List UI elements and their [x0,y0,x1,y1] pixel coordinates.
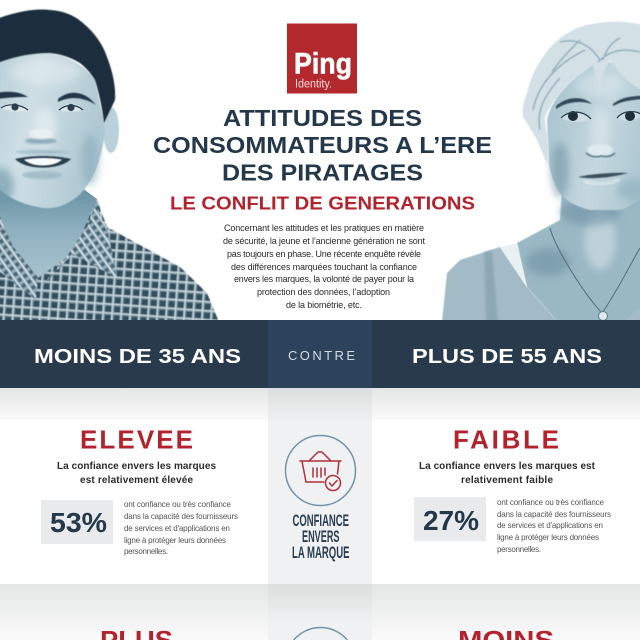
statement [57,461,216,486]
statement [419,461,596,486]
intro text: pas toujours en phase. Une récente enquête révèle [227,249,421,259]
intro text: des différences marquées touchant la confiance [231,262,417,272]
description: de services et d'applications en [497,521,603,530]
label: brand trust: ENVERS [302,527,340,546]
face [547,60,640,210]
brows and eyes [556,98,592,109]
nose [587,144,613,156]
smile [16,150,68,154]
neck [0,189,97,278]
label: brand trust: CONFIANCE [292,511,349,530]
icon: shopping basket with check [286,436,356,506]
stat box [414,497,486,541]
description: personnelles. [497,545,541,554]
heading: ELEVEE [80,424,193,454]
description: dans la capacité des fournisseurs [124,512,238,521]
left collar [0,212,38,300]
title [153,105,492,186]
heading: FAIBLE [453,424,559,454]
description: personnelles. [124,547,168,556]
mouth [578,173,628,178]
photo: older woman [442,22,640,322]
intro text: Concernant les attitudes et les pratiques en matière [224,223,424,233]
intro text [223,223,425,310]
description [497,498,611,554]
statement: relativement faible [461,475,553,486]
title: ATTITUDES DES [223,105,422,131]
row shadows and centre column [0,388,640,640]
hair [0,10,115,123]
face [0,53,105,208]
label: brand trust: LA MARQUE [292,543,350,562]
stat box: 53% [50,507,107,538]
subtitle: LE CONFLIT DE GENERATIONS [170,192,475,214]
stat box [41,500,113,544]
intro text: de sécurité, la jeune et l’ancienne génération ne sont [223,236,425,246]
stat box: 27% [423,505,479,536]
description [124,500,238,556]
description: ont confiance ou très confiance [497,498,605,507]
necklace [550,228,640,313]
logo: Ping Identity [287,24,357,94]
strap [500,243,527,287]
header band [0,320,640,388]
statement: La confiance envers les marques est [419,461,596,472]
ear [103,107,119,153]
hair [523,22,640,165]
nose [25,138,57,144]
next row icon circle [294,628,347,640]
description: ligne à protéger leurs données [497,533,599,542]
versus label: CONTRE [288,348,355,363]
description: de services et d'applications en [124,524,230,533]
intro text: de la biométrie, etc. [286,300,362,310]
intro text: protection des données, l’adoption [257,287,390,297]
statement: La confiance envers les marques [57,461,216,472]
shirt [0,200,219,322]
description: ligne à protéger leurs données [124,536,226,545]
label: brand trust [292,511,350,562]
panel: under 35 trust [41,424,238,556]
description: ont confiance ou très confiance [124,500,232,509]
right generation label: PLUS DE 55 ANS [412,346,602,368]
logo: Ping Identity: Identity. [295,78,332,90]
right collar [40,199,117,288]
next row: cropped headings and icon [100,625,554,640]
panel: over 55 trust [414,424,611,554]
photo: young man [0,10,219,322]
lower neckline of sweater [625,308,640,320]
left generation label: MOINS DE 35 ANS [34,346,241,368]
statement: est relativement élevée [80,475,193,486]
title: DES PIRATAGES [222,160,423,186]
description: dans la capacité des fournisseurs [497,510,611,519]
chest and neck [517,190,640,322]
brows and eyes [0,92,28,101]
logo: Ping Identity: Ping [294,48,352,80]
title: CONSOMMATEURS A L’ERE [153,132,492,158]
sweater [442,247,558,322]
intro text: envers les marques, la volonté de payer pour la [234,274,414,284]
